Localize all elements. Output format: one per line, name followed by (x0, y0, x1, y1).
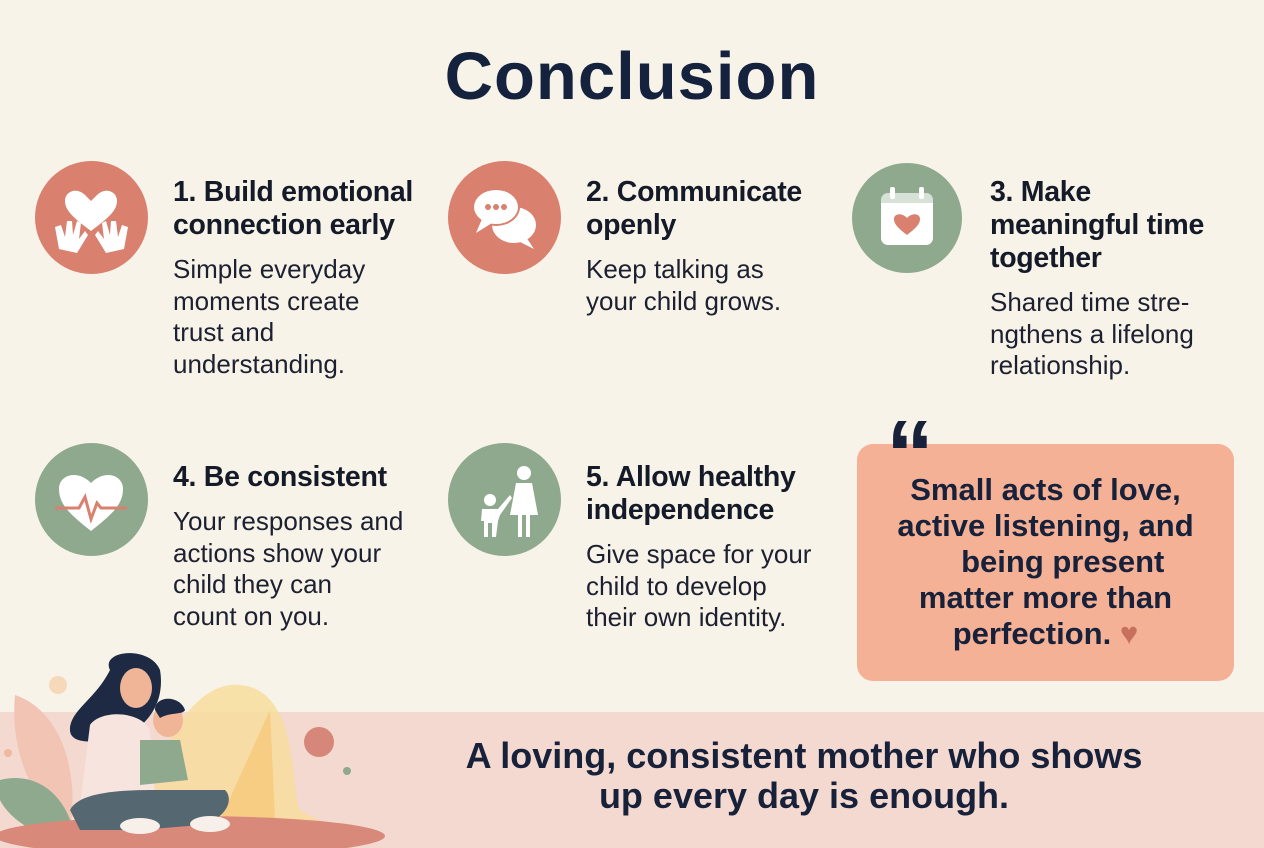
item 1: understanding. (173, 348, 345, 378)
item 5: child to develop (586, 570, 767, 600)
item 3: ngthens a lifelong (990, 318, 1194, 348)
item 3 (990, 176, 1204, 380)
item 1: trust and (173, 317, 274, 347)
item 1: connection early (173, 209, 395, 241)
icon: heartbeat (35, 443, 148, 556)
item 1: moments create (173, 286, 359, 316)
quote text (897, 472, 1194, 651)
item 4: count on you. (173, 600, 329, 630)
callout: quote box (857, 444, 1234, 681)
icon: parent and child (448, 443, 561, 556)
item 3: 3. Make (990, 176, 1091, 208)
item 4: actions show your (173, 538, 381, 568)
item 5: their own identity. (586, 602, 786, 632)
item 4 (173, 461, 403, 630)
item 1: 1. Build emotional (173, 176, 413, 208)
item 3: relationship. (990, 350, 1130, 380)
item 2 (586, 176, 802, 316)
item 2: openly (586, 209, 676, 241)
item 3: Shared time stre- (990, 287, 1189, 317)
icon: calendar (852, 163, 962, 273)
title: Conclusion (445, 39, 819, 114)
tagline: A loving, consistent mother who shows (466, 735, 1142, 776)
item 1: Simple everyday (173, 254, 365, 284)
item 5: Give space for your (586, 539, 811, 569)
quote text: being present (961, 544, 1164, 579)
icon: quote mark: “ (886, 401, 934, 508)
item 5: independence (586, 494, 774, 526)
icon: speech bubbles (448, 161, 561, 274)
item 5: 5. Allow healthy (586, 461, 796, 493)
item 4: 4. Be consistent (173, 461, 387, 493)
item 2: your child grows. (586, 286, 781, 316)
item 4: Your responses and (173, 506, 403, 536)
item 2: Keep talking as (586, 254, 764, 284)
item 3: meaningful time (990, 209, 1204, 241)
illustration: mother and child (0, 653, 385, 848)
quote text: Small acts of love, (910, 472, 1181, 507)
item 4: child they can (173, 569, 332, 599)
item 1 (173, 176, 413, 378)
item 5 (586, 461, 811, 632)
bottom band (0, 712, 1264, 848)
icon: hands heart (35, 161, 148, 274)
tagline: up every day is enough. (599, 775, 1009, 816)
quote text: active listening, and (897, 508, 1194, 543)
item 3: together (990, 242, 1102, 274)
quote text: matter more than (919, 580, 1172, 615)
tagline (466, 735, 1142, 816)
item 2: 2. Communicate (586, 176, 802, 208)
quote text: perfection. ♥ (953, 616, 1138, 651)
